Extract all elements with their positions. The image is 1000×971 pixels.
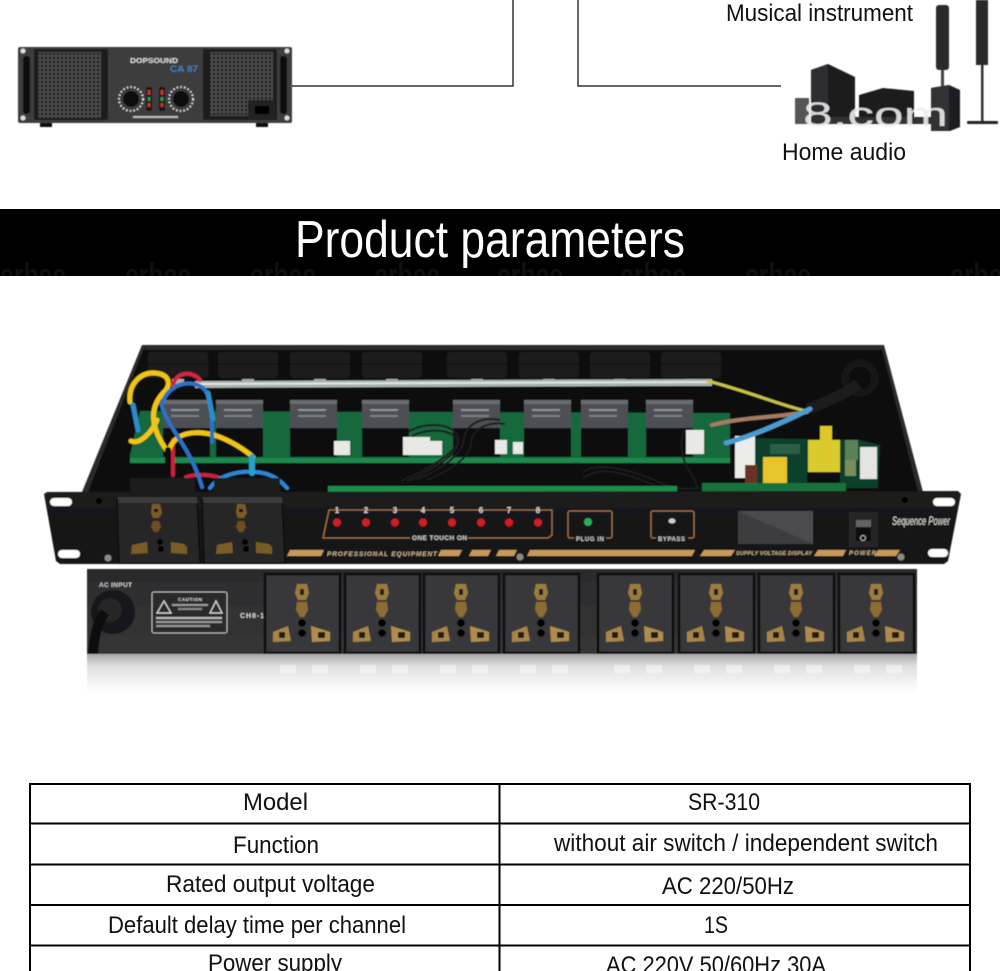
rack holes [50, 498, 955, 558]
row: function [233, 830, 938, 859]
caution label [152, 592, 227, 633]
rear sockets [265, 574, 914, 653]
orange label stripes [287, 550, 900, 556]
lower circuit strips [328, 486, 677, 492]
icon: home audio speakers: 8.com [803, 96, 948, 134]
power switch [849, 512, 878, 547]
mains wires [708, 381, 810, 443]
channel LED panel: 4 [421, 506, 426, 515]
row: rated output voltage: Rated output voltage [166, 871, 375, 898]
power supply board [735, 426, 880, 488]
row: default delay: Default delay time per channel [108, 912, 406, 939]
voltage display [738, 511, 813, 544]
row: default delay: 1S [704, 912, 728, 939]
chassis interior [85, 345, 920, 492]
banner: product parameters: erbee [125, 257, 191, 295]
panel captions: POWER [849, 551, 877, 557]
AC input cable [91, 590, 135, 654]
banner: product parameters: erbee [745, 257, 811, 295]
row: model [243, 789, 760, 816]
table grid [30, 784, 970, 971]
plug in indicator: PLUG IN [576, 537, 604, 543]
panel captions: PROFESSIONAL EQUIPMENT [327, 551, 438, 558]
channel LED panel: 1 [335, 506, 340, 515]
channel LED panel: 7 [507, 506, 512, 515]
channel LED panel: 3 [393, 506, 398, 515]
row: rated output voltage [166, 871, 794, 900]
bypass indicator: BYPASS [658, 537, 685, 543]
banner: product parameters [0, 209, 1000, 276]
relays [163, 400, 693, 457]
connector line: home audio [578, 0, 781, 86]
heading: Product parameters [295, 211, 685, 269]
plug in indicator [568, 511, 612, 543]
label: home audio: Home audio [782, 139, 906, 166]
specification table [30, 784, 970, 971]
banner: product parameters: erbee [497, 257, 563, 295]
banner: product parameters: erbee [374, 257, 440, 295]
caution label: CAUTION [178, 597, 202, 602]
row: power supply [208, 950, 826, 971]
row: default delay [108, 912, 728, 939]
banner: product parameters: erbee [250, 257, 316, 295]
brand script: Sequence Power [892, 514, 951, 528]
bypass indicator [651, 511, 694, 543]
row: model: SR-310 [688, 789, 760, 816]
green circuit board [130, 411, 730, 463]
reflection [87, 654, 917, 694]
rear relay row [148, 352, 721, 384]
panel captions: SUPPLY VOLTAGE DISPLAY [736, 551, 813, 557]
rear panel [87, 569, 917, 654]
product photo: sequencer rear view [87, 569, 917, 694]
row: model: Model [243, 789, 308, 816]
front sockets [117, 497, 285, 563]
row: function: Function [233, 832, 319, 859]
channel LED panel: 2 [364, 506, 369, 515]
channel LED panel: 6 [479, 506, 484, 515]
product photo: sequencer top view [44, 345, 961, 564]
black wire bundles [401, 419, 701, 489]
channel LED panel [323, 506, 552, 542]
connector line: amplifier [292, 0, 513, 86]
row: rated output voltage: AC 220/50Hz [662, 873, 794, 900]
channel LED panel: ONE TOUCH ON [412, 535, 467, 542]
bus bar [195, 379, 712, 388]
cable grommet [808, 359, 879, 409]
white connectors [334, 430, 704, 455]
banner: product parameters: erbee [0, 257, 66, 295]
AC input label: AC INPUT [99, 582, 132, 589]
icon: power amplifier [18, 47, 292, 127]
front panel [44, 491, 961, 564]
icon: home audio speakers [795, 0, 998, 134]
channel label: CH8-1 [240, 613, 264, 620]
coloured jumper wires [130, 373, 287, 488]
row: function: without air switch / independent switch [553, 830, 938, 857]
icon: power amplifier: CA 87 [170, 64, 198, 74]
channel LED panel: 5 [450, 506, 455, 515]
front socket backs [130, 478, 195, 493]
channel LED panel: 8 [536, 506, 541, 515]
panel screws [96, 497, 908, 562]
panel captions [327, 551, 877, 558]
banner: product parameters: erbee [620, 257, 686, 295]
label: musical instrument: Musical instrument [726, 0, 913, 27]
icon: power amplifier: DOPSOUND [130, 58, 178, 65]
